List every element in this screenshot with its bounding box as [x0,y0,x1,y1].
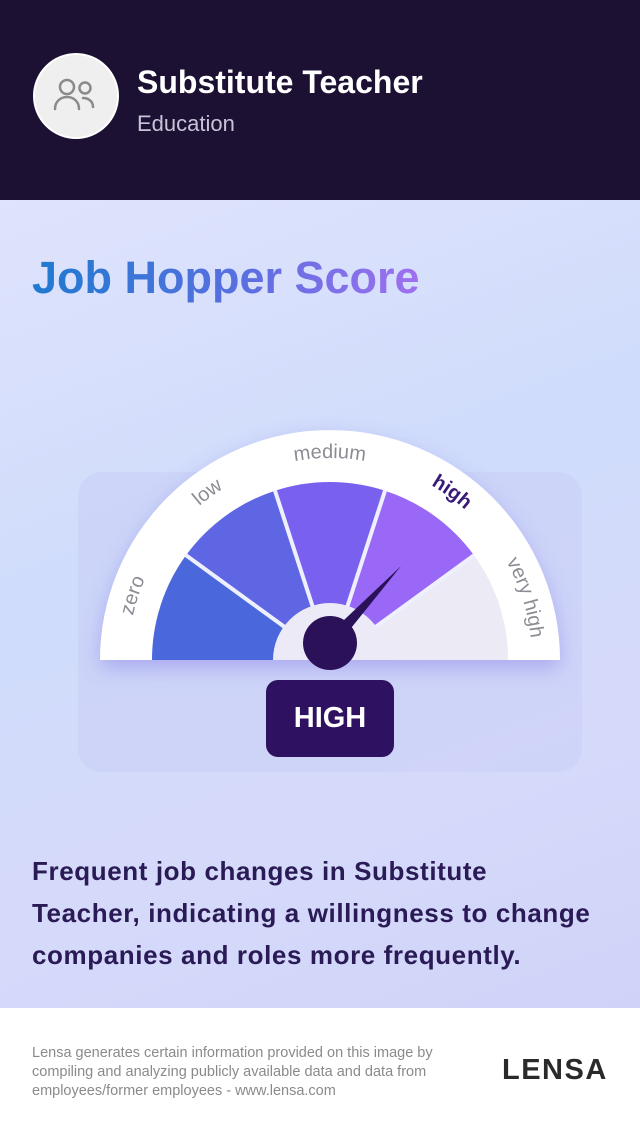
description text [32,856,590,970]
gauge card [78,472,582,772]
gauge [93,428,567,676]
footer [0,1008,640,1136]
title: job name: Substitute Teacher [137,64,423,100]
description text: companies and roles more frequently. [32,940,521,970]
badge: HIGH: HIGH [294,702,366,734]
gauge: high [432,473,470,509]
logo: LENSA [502,1054,608,1086]
heading: Job Hopper Score [32,252,420,303]
description text: Teacher, indicating a willingness to change [32,898,590,928]
badge: HIGH [266,680,394,757]
disclaimer: Lensa generates certain information provided on this image by compiling and analyzing publicly available data and data from employees/former employees - www.lensa.com [32,1045,433,1099]
subtitle: category: Education [137,111,235,136]
gauge: low [191,480,221,505]
main panel [0,200,640,1008]
icon: avatar [33,53,119,139]
header [0,0,640,200]
description text: Frequent job changes in Substitute [32,856,487,886]
gauge: medium [294,444,365,461]
gauge: zero [122,576,144,616]
gauge: very high [508,556,544,637]
